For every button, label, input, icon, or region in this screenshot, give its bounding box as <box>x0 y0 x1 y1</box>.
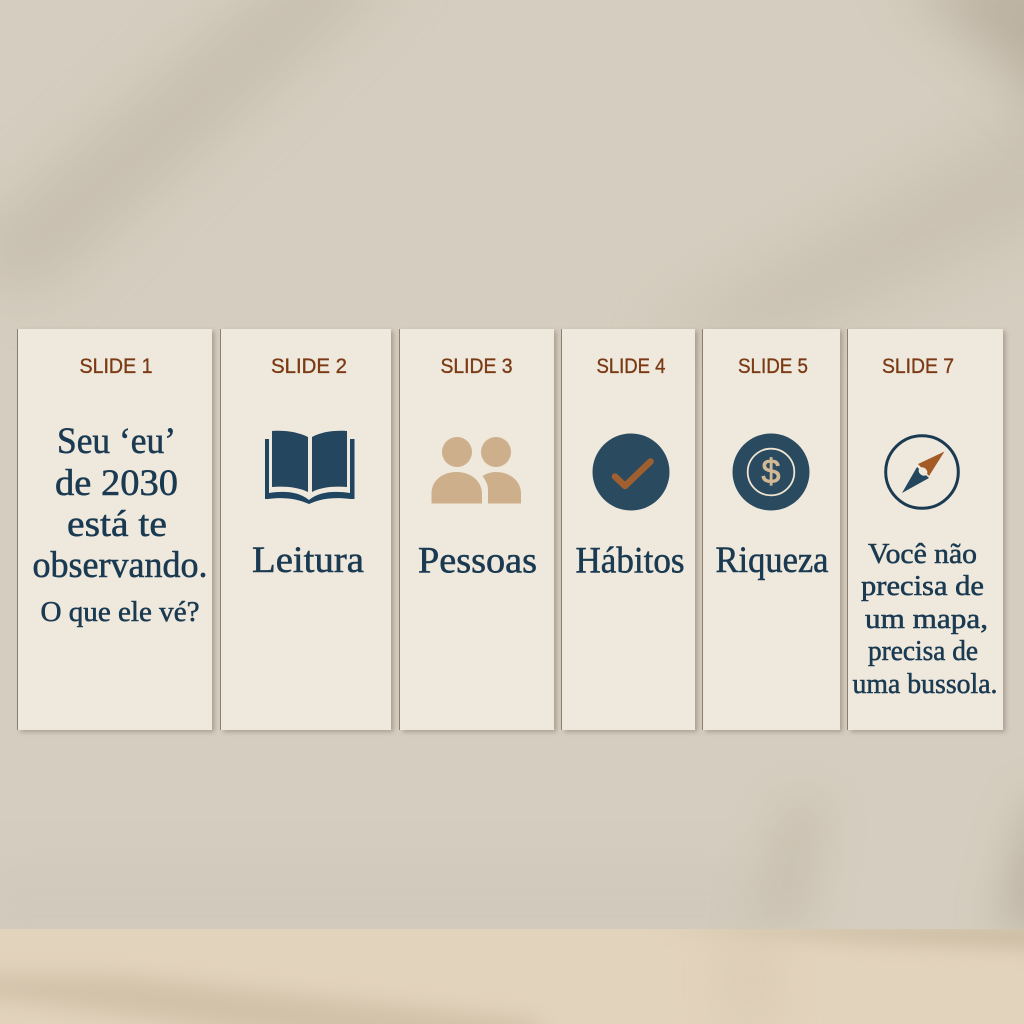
text: slide 7 message: Você não <box>868 538 977 570</box>
heading: slide 1 question: está te <box>67 504 167 545</box>
icon: check mark <box>592 434 670 510</box>
icon: two people <box>432 437 521 504</box>
heading: slide 1 question: de 2030 <box>55 463 178 504</box>
text: slide 7 message: precisa de <box>868 635 978 667</box>
panel: slide 3 <box>399 329 554 730</box>
label: slide 2: SLIDE 2 <box>271 355 347 378</box>
text: slide 7 message: um mapa, <box>865 603 988 635</box>
label: slide 4: SLIDE 4 <box>596 355 666 378</box>
icon: compass <box>886 436 958 508</box>
heading: slide 1 question <box>32 421 208 586</box>
heading: Leitura: Leitura <box>252 540 364 581</box>
panel: slide 7 <box>847 329 1003 730</box>
icon: open book <box>265 431 354 504</box>
heading: slide 1 question: Seu ‘eu’ <box>57 421 176 462</box>
heading: Riqueza: Riqueza <box>716 540 829 581</box>
heading: Pessoas: Pessoas <box>418 540 537 582</box>
label: slide 5: SLIDE 5 <box>738 355 808 378</box>
text: slide 7 message: uma bussola. <box>852 668 998 700</box>
label: slide 3: SLIDE 3 <box>440 355 512 378</box>
label: slide 1: SLIDE 1 <box>80 355 152 378</box>
panel: slide 5 <box>702 329 840 730</box>
text: slide 7 message: precisa de <box>861 570 984 602</box>
icon: dollar coin <box>732 434 810 510</box>
icon: dollar coin: $ <box>762 453 781 491</box>
heading: Hábitos: Hábitos <box>576 540 684 582</box>
panel: slide 4 <box>561 329 695 730</box>
floor surface <box>0 926 1024 1024</box>
panel: slide 1 <box>17 329 212 730</box>
heading: slide 1 question: observando. <box>32 545 208 586</box>
subheading: slide 1: O que ele vé? <box>40 596 200 628</box>
panel: slide 2 <box>220 329 391 730</box>
label: slide 7: SLIDE 7 <box>882 355 954 378</box>
text: slide 7 message <box>852 538 998 700</box>
